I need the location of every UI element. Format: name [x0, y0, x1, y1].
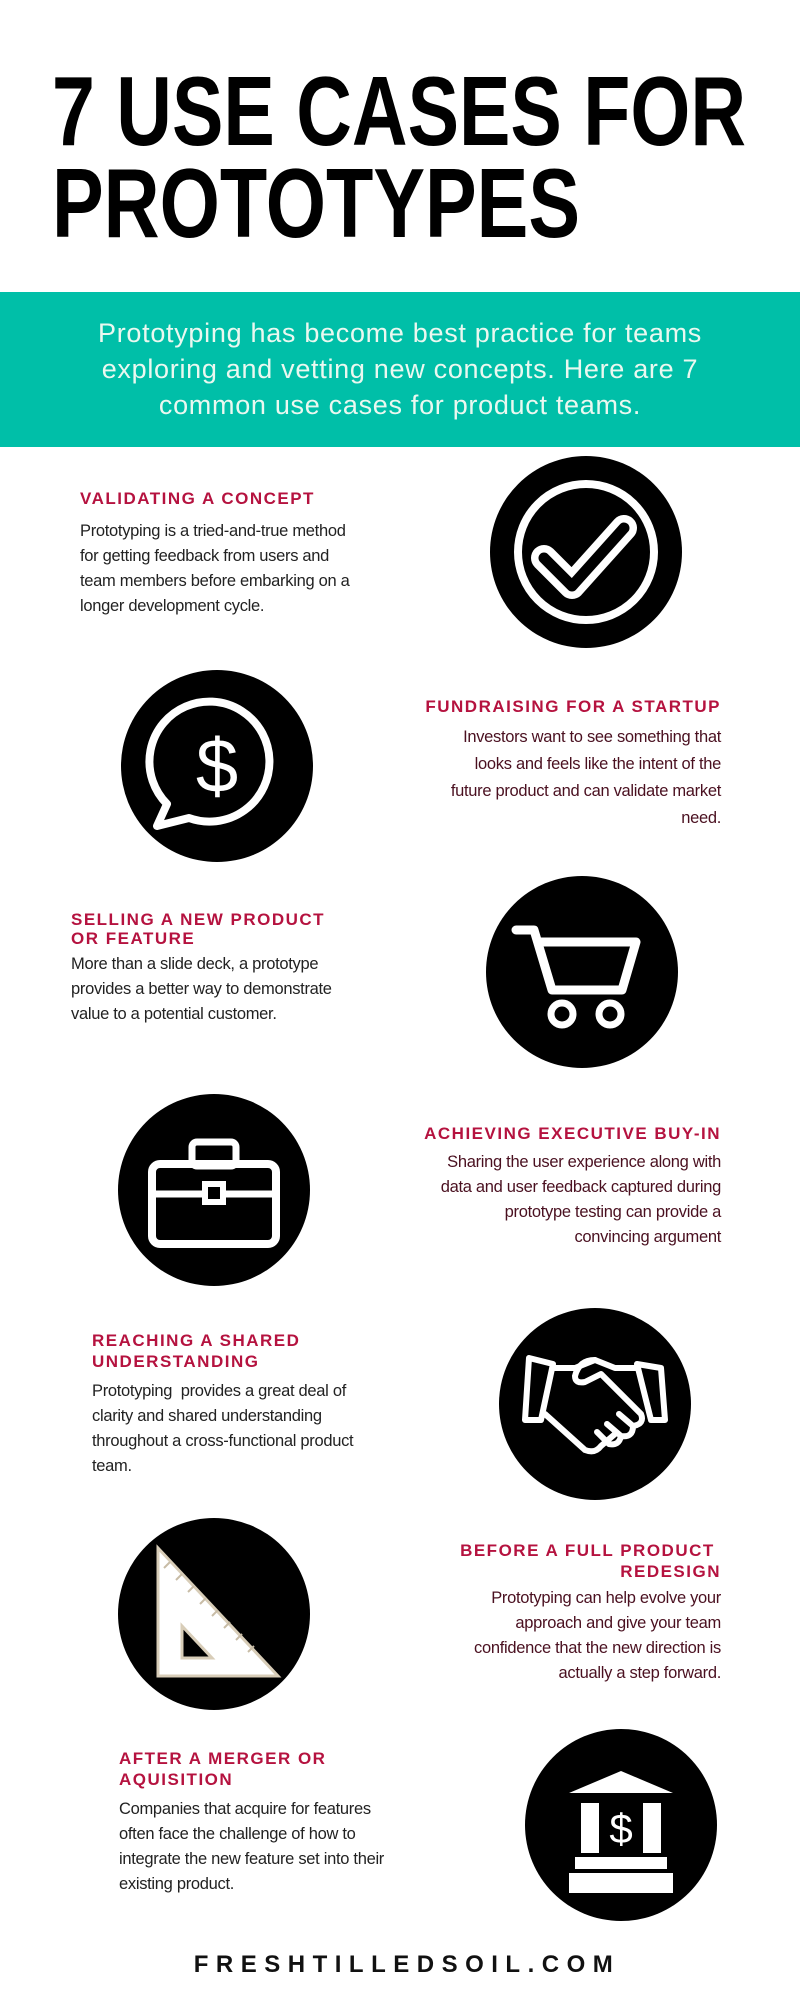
title [52, 60, 746, 258]
item 3 text: provides a better way to demonstrate [71, 980, 332, 998]
item 2 text: future product and can validate market [451, 782, 721, 800]
intro band: exploring and vetting new concepts. Here are 7 [102, 354, 698, 384]
item 1 text: team members before embarking on a [80, 572, 350, 590]
icon: check [490, 456, 682, 648]
icon: bank [525, 1729, 717, 1921]
item 7 text: often face the challenge of how to [119, 1825, 356, 1843]
item 2 text: Investors want to see something that [463, 728, 721, 746]
item 5 text [92, 1331, 354, 1475]
item 5 text: throughout a cross-functional product [92, 1432, 353, 1450]
item 7 text [119, 1749, 384, 1893]
item 6 text: Prototyping can help evolve your [491, 1589, 721, 1607]
item 6 text [460, 1541, 721, 1682]
icon: handshake [499, 1308, 691, 1500]
item 4 text [424, 1124, 722, 1246]
item 4 text: convincing argument [574, 1228, 721, 1246]
item 4 text: prototype testing can provide a [505, 1203, 721, 1221]
icon: briefcase [118, 1094, 310, 1286]
item 3 text: value to a potential customer. [71, 1005, 277, 1023]
item 1 text: for getting feedback from users and [80, 547, 329, 565]
item 4 text: Sharing the user experience along with [447, 1153, 721, 1171]
item 7 text: existing product. [119, 1875, 234, 1893]
item 1 text: longer development cycle. [80, 597, 264, 615]
item 5 text: clarity and shared understanding [92, 1407, 322, 1425]
item 1 text: VALIDATING A CONCEPT [80, 489, 315, 508]
item 6 text: confidence that the new direction is [474, 1639, 721, 1657]
item 3 text: SELLING A NEW PRODUCT [71, 910, 325, 929]
icon: set square [118, 1518, 310, 1710]
item 2 text: FUNDRAISING FOR A STARTUP [425, 697, 721, 716]
item 6 text: BEFORE A FULL PRODUCT [460, 1541, 715, 1560]
icon: bank: $ [609, 1805, 633, 1852]
item 7 text: integrate the new feature set into their [119, 1850, 384, 1868]
item 2 text: need. [681, 809, 721, 827]
intro band: common use cases for product teams. [159, 390, 641, 420]
intro band [0, 292, 800, 447]
item 7 text: AFTER A MERGER OR [119, 1749, 326, 1768]
item 7 text: Companies that acquire for features [119, 1800, 371, 1818]
item 2 text [425, 697, 722, 827]
icon: dollar bubble [121, 670, 313, 862]
item 5 text: UNDERSTANDING [92, 1352, 259, 1371]
item 3 text: More than a slide deck, a prototype [71, 955, 318, 973]
footer: FRESHTILLEDSOIL.COM [194, 1951, 620, 1978]
icon: cart [486, 876, 678, 1068]
icon: dollar bubble: $ [196, 724, 238, 809]
item 6 text: REDESIGN [620, 1562, 721, 1581]
title: PROTOTYPES [52, 148, 580, 258]
item 2 text: looks and feels like the intent of the [475, 755, 721, 773]
item 5 text: Prototyping provides a great deal of [92, 1382, 346, 1400]
item 1 text [80, 489, 350, 615]
item 4 text: ACHIEVING EXECUTIVE BUY-IN [424, 1124, 721, 1143]
item 5 text: team. [92, 1457, 132, 1475]
item 3 text: OR FEATURE [71, 929, 195, 948]
item 6 text: approach and give your team [515, 1614, 721, 1632]
item 5 text: REACHING A SHARED [92, 1331, 300, 1350]
item 3 text [71, 910, 332, 1023]
item 1 text: Prototyping is a tried-and-true method [80, 522, 346, 540]
intro band: Prototyping has become best practice for teams [98, 318, 702, 348]
item 7 text: AQUISITION [119, 1770, 233, 1789]
item 6 text: actually a step forward. [559, 1664, 721, 1682]
item 4 text: data and user feedback captured during [441, 1178, 721, 1196]
